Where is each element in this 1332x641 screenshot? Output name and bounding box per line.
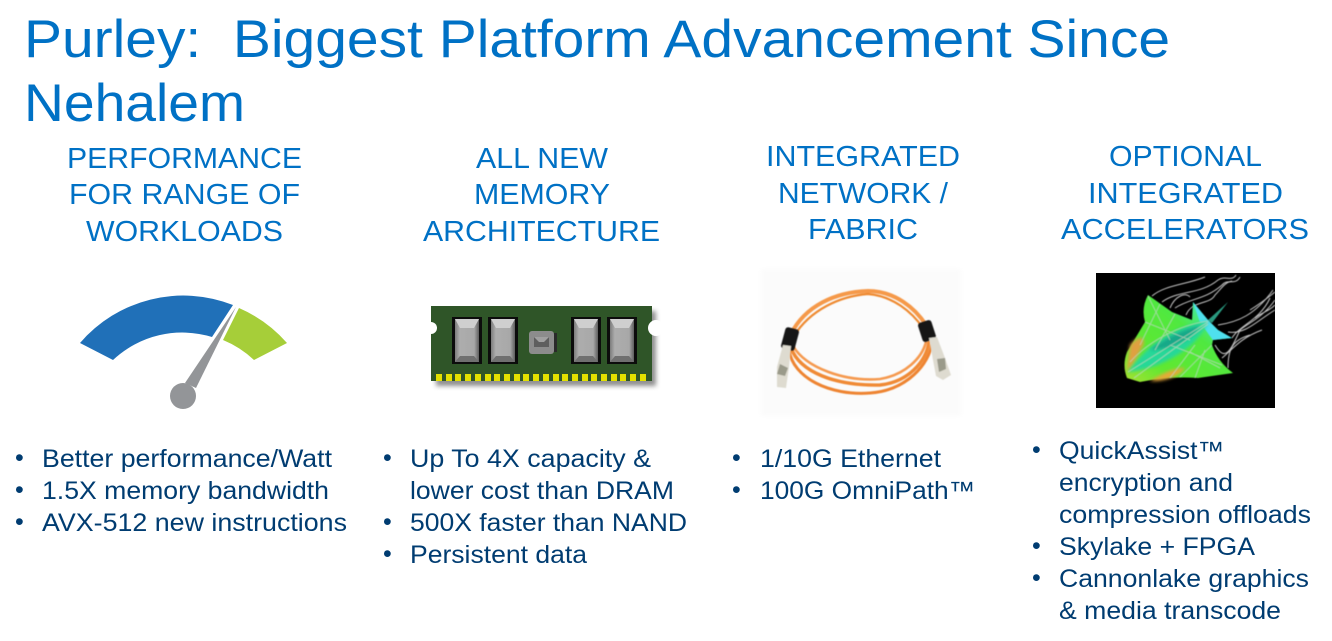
bullet list: memory: 500X faster than NAND [410, 509, 687, 537]
heading: network fabric: NETWORK / [778, 178, 949, 210]
bullet list: accelerators: QuickAssist™ [1059, 437, 1224, 465]
heading: performance: WORKLOADS [86, 216, 283, 248]
bullet list: network fabric: 1/10G Ethernet [760, 445, 941, 473]
heading: memory: ARCHITECTURE [423, 216, 660, 248]
heading: network fabric [766, 141, 960, 246]
bullet list: memory: Up To 4X capacity & [410, 445, 651, 473]
bullet list: accelerators: • [1032, 436, 1041, 464]
panel: performance [15, 143, 347, 537]
bullet list: memory: lower cost than DRAM [410, 477, 674, 505]
icon: speedometer gauge [80, 296, 287, 409]
heading: accelerators: INTEGRATED [1088, 178, 1283, 210]
bullet list: memory: Persistent data [410, 541, 587, 569]
bullet list: network fabric: 100G OmniPath™ [760, 477, 975, 505]
bullet list: performance: • [15, 444, 24, 472]
bullet list: network fabric: • [732, 476, 741, 504]
bullet list: performance: Better performance/Watt [42, 445, 332, 473]
bullet list: performance: 1.5X memory bandwidth [42, 477, 329, 505]
heading: memory: MEMORY [474, 179, 610, 211]
image: accelerator flow visualization [1096, 273, 1275, 408]
title [24, 10, 1170, 133]
bullet list: accelerators: encryption and [1059, 469, 1233, 497]
bullet list: accelerators [1032, 436, 1311, 625]
bullet list: accelerators: • [1032, 532, 1041, 560]
heading: accelerators: OPTIONAL [1109, 141, 1262, 173]
image: fiber optic cable [761, 269, 961, 416]
bullet list: performance: • [15, 508, 24, 536]
panel: memory [383, 143, 687, 569]
icon: memory module [425, 306, 664, 386]
bullet list: network fabric: • [732, 444, 741, 472]
panel: network fabric [732, 141, 975, 505]
title: Purley: Biggest Platform Advancement Since [24, 10, 1170, 69]
bullet list: memory: • [383, 444, 392, 472]
bullet list: accelerators: & media transcode [1059, 597, 1281, 625]
bullet list: performance [15, 444, 347, 537]
heading: memory: ALL NEW [476, 143, 609, 175]
bullet list: memory: • [383, 540, 392, 568]
heading: accelerators: ACCELERATORS [1061, 214, 1309, 246]
bullet list: performance: • [15, 476, 24, 504]
bullet list: memory [383, 444, 687, 569]
bullet list: performance: AVX-512 new instructions [42, 509, 347, 537]
bullet list: memory: • [383, 508, 392, 536]
heading: network fabric: INTEGRATED [766, 141, 960, 173]
bullet list: network fabric [732, 444, 975, 505]
heading: performance: PERFORMANCE [67, 143, 302, 175]
heading: accelerators [1061, 141, 1309, 246]
bullet list: accelerators: • [1032, 564, 1041, 592]
heading: memory [423, 143, 660, 248]
panel: accelerators [1032, 141, 1311, 625]
bullet list: accelerators: compression offloads [1059, 501, 1311, 529]
bullet list: accelerators: Cannonlake graphics [1059, 565, 1309, 593]
bullet list: accelerators: Skylake + FPGA [1059, 533, 1255, 561]
heading: network fabric: FABRIC [808, 214, 918, 246]
heading: performance [67, 143, 302, 248]
heading: performance: FOR RANGE OF [69, 179, 300, 211]
title: Nehalem [24, 74, 245, 133]
